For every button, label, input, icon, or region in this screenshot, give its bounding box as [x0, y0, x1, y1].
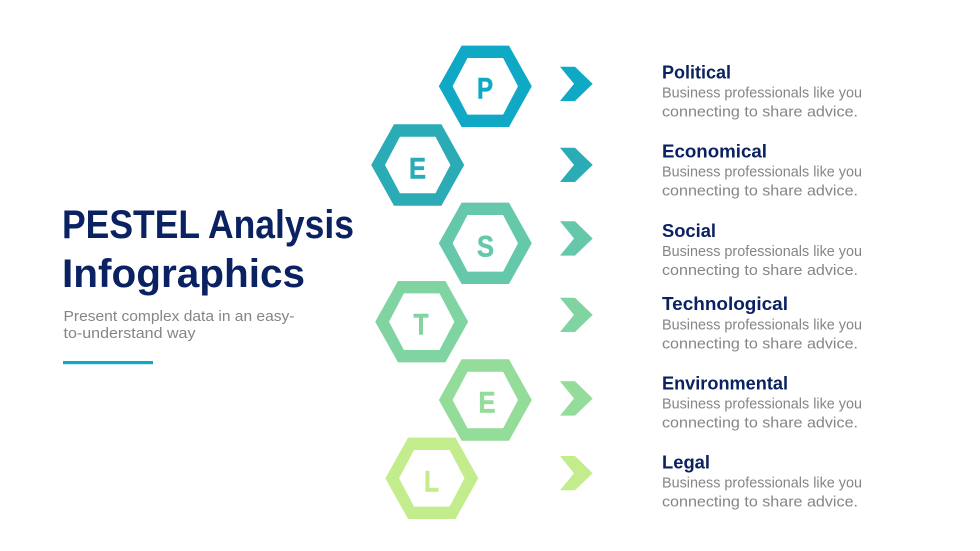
subtitle: Present complex data in an easy-: [64, 308, 294, 325]
text block: Environmental: connecting to share advice.: [662, 415, 858, 432]
hexagon: E: [439, 359, 532, 441]
text block: Environmental: Business professionals like you: [662, 396, 862, 412]
text block: Technological: [662, 293, 862, 353]
text block: Social: Social: [662, 220, 716, 241]
hexagon: T: T: [414, 308, 428, 341]
text block: Environmental: [662, 372, 862, 432]
hexagon: E: E: [478, 387, 496, 420]
hexagon: S: S: [477, 231, 494, 264]
text block: Economical: Business professionals like you: [662, 164, 862, 180]
text block: Social: Business professionals like you: [662, 243, 862, 260]
text block: Economical: connecting to share advice.: [662, 183, 858, 200]
text block: Legal: connecting to share advice.: [662, 494, 858, 511]
text block: Political: [662, 62, 862, 121]
hexagon: E: [371, 124, 464, 206]
text block: Legal: [662, 452, 862, 511]
text block: Legal: Business professionals like you: [662, 474, 862, 492]
text block: Environmental: Environmental: [662, 372, 788, 394]
text block: Political: connecting to share advice.: [662, 104, 858, 121]
hexagon: S: [439, 203, 532, 284]
arrow: T: [560, 298, 593, 332]
text block: Economical: [662, 140, 862, 200]
text block: Social: connecting to share advice.: [662, 262, 858, 279]
title: Infographics: [62, 252, 305, 296]
arrow: L: [560, 456, 593, 490]
text block: Technological: connecting to share advice.: [662, 336, 858, 353]
subtitle: to-understand way: [64, 325, 196, 342]
hexagon: L: L: [424, 466, 439, 499]
text block: Political: Business professionals like you: [662, 84, 862, 102]
text block: Political: Political: [662, 62, 731, 82]
arrow: E: [560, 381, 593, 416]
arrow: S: [560, 221, 593, 256]
arrow: E: [560, 148, 593, 182]
subtitle: [64, 308, 294, 342]
title: PESTEL Analysis: [62, 203, 354, 247]
title: [62, 203, 354, 296]
hexagon: T: [375, 281, 468, 362]
text block: Legal: Legal: [662, 452, 710, 472]
text block: Technological: Technological: [662, 293, 788, 314]
hexagon: E: E: [409, 152, 426, 185]
hexagon: P: [439, 46, 532, 127]
hexagon: L: [385, 438, 478, 519]
arrow: P: [560, 67, 593, 101]
text block: Social: [662, 220, 862, 279]
text block: Economical: Economical: [662, 140, 767, 162]
text block: Technological: Business professionals like you: [662, 316, 862, 334]
title accent bar: [63, 361, 153, 364]
hexagon: P: P: [477, 72, 493, 105]
